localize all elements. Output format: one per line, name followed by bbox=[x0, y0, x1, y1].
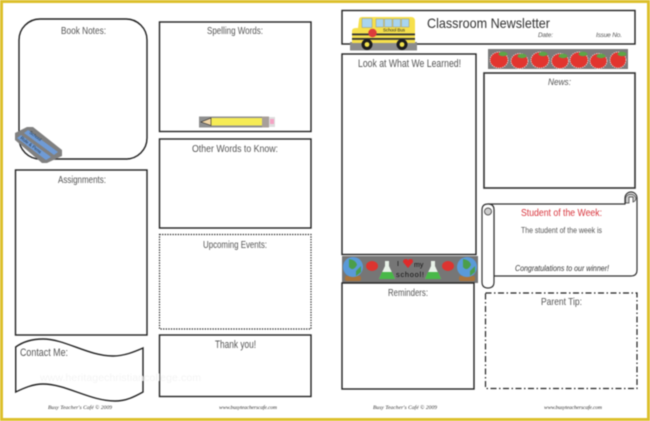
panel: other words to know bbox=[160, 139, 311, 228]
panel: newsletter header: Issue No. bbox=[596, 32, 622, 39]
icon: school bus: School Bus bbox=[383, 28, 406, 32]
panel: look at what we learned: Look at What We Learned! bbox=[358, 58, 461, 70]
panel: news: News: bbox=[548, 77, 571, 87]
panel: student of the week scroll: Student of the Week: bbox=[521, 208, 602, 219]
panel: thank you: Thank you! bbox=[215, 339, 256, 351]
icon: blue ruler badge bbox=[15, 127, 62, 163]
panel: upcoming events: Upcoming Events: bbox=[203, 240, 267, 251]
banner: I love my school: school! bbox=[396, 270, 424, 279]
panel: student of the week scroll: Congratulations to our winner! bbox=[515, 264, 610, 273]
panel: newsletter header: Date: bbox=[538, 32, 553, 39]
panel: book notes: Book Notes: bbox=[61, 26, 106, 37]
panel: spelling words: Spelling Words: bbox=[207, 26, 263, 37]
panel: thank you bbox=[160, 335, 311, 396]
panel: parent tip bbox=[486, 293, 637, 388]
panel: assignments: Assignments: bbox=[58, 175, 106, 186]
banner: I love my school bbox=[342, 256, 478, 283]
panel: book notes bbox=[19, 19, 147, 159]
panel: student of the week scroll bbox=[482, 192, 637, 288]
panel: student of the week scroll: The student of the week is bbox=[521, 226, 602, 235]
panel: assignments bbox=[16, 170, 147, 335]
panel: reminders bbox=[342, 283, 474, 389]
panel: contact me wavy flag bbox=[16, 339, 143, 401]
panel: other words to know: Other Words to Know: bbox=[192, 144, 278, 155]
panel: contact me wavy flag: Contact Me: bbox=[20, 347, 68, 359]
icon: apple strip bbox=[488, 49, 628, 69]
panel: newsletter header bbox=[342, 10, 635, 44]
panel: newsletter header: Classroom Newsletter bbox=[427, 15, 550, 31]
footer: right url: www.busyteacherscafe.com bbox=[544, 404, 602, 411]
panel: news bbox=[484, 73, 635, 188]
footer: left credit: Busy Teacher's Café © 2009 bbox=[48, 404, 112, 411]
panel: parent tip: Parent Tip: bbox=[541, 296, 582, 308]
icon: school bus bbox=[350, 17, 417, 50]
icon: pencil bbox=[199, 116, 275, 128]
panel: upcoming events bbox=[160, 234, 311, 329]
footer: left url: www.busyteacherscafe.com bbox=[219, 404, 277, 411]
panel: spelling words bbox=[160, 22, 311, 132]
banner: I love my school: my bbox=[414, 262, 424, 269]
banner: I love my school: I bbox=[397, 261, 399, 268]
icon: blue ruler badge: School bbox=[28, 130, 42, 142]
panel: look at what we learned bbox=[342, 54, 476, 254]
footer: right credit: Busy Teacher's Café © 2009 bbox=[373, 404, 437, 411]
panel: reminders: Reminders: bbox=[388, 288, 428, 299]
watermark: www.heritagechristiancollege.com bbox=[39, 372, 201, 384]
icon: blue ruler badge: Rule & Pens bbox=[19, 135, 43, 155]
